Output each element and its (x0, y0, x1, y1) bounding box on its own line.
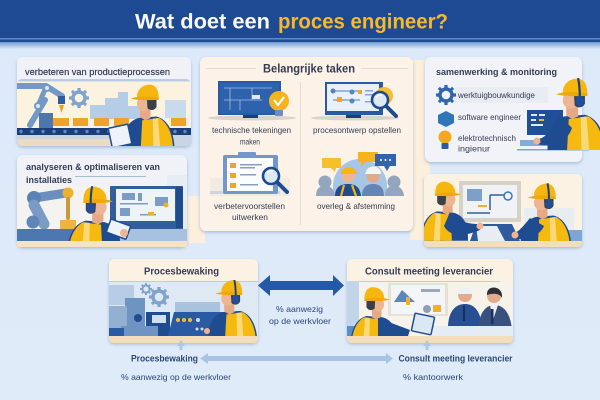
icon: light bulb (438, 130, 452, 149)
list item: software engineer: software engineer (458, 112, 521, 122)
task: technische tekeningen (208, 81, 296, 146)
heading: Procesbewaking (144, 266, 219, 278)
task: verbetervoorstellen (210, 152, 290, 222)
small arrow right (423, 340, 431, 350)
desk console (470, 224, 520, 241)
header banner (0, 0, 600, 49)
label: procesbewaking: % aanwezig op de werkvloer (121, 372, 231, 382)
robot arm (17, 85, 62, 125)
label: technische tekeningen (212, 125, 291, 135)
icon: two workers and speech bubbles (316, 152, 404, 196)
chairs (427, 222, 582, 241)
list item: werktuigbouwkundige: werktuigbouwkundige (457, 90, 535, 100)
boxes on conveyor (53, 118, 186, 126)
label: overleg & afstemming (317, 201, 395, 211)
monitor (110, 186, 183, 230)
icon: gear (69, 88, 89, 108)
heading: Consult meeting leverancier (365, 266, 493, 278)
title: proces engineer? (278, 10, 448, 34)
text: aanwezig op de werkvloer (269, 304, 331, 326)
worker right (512, 183, 572, 247)
list item: elektrotechnisch: elektrotechnisch (458, 133, 516, 143)
meeting illustration (347, 281, 513, 336)
worker (68, 186, 120, 241)
board (388, 283, 448, 316)
text: aanwezig op de werkvloer: op de werkvloer (269, 316, 331, 326)
icon: blueprint monitor (208, 81, 296, 120)
tablet (108, 124, 132, 148)
panel: consult meeting leverancier (347, 259, 513, 345)
double arrow (258, 275, 344, 296)
label: consult meeting leverancier (398, 354, 513, 382)
panel: belangrijke taken (200, 57, 413, 231)
label: procesontwerp opstellen (313, 125, 401, 135)
icon: clipboard with magnifier (210, 152, 290, 196)
label: consult meeting leverancier: % kantoorwerk (403, 372, 464, 382)
list item: werktuigbouwkundige (436, 85, 548, 105)
list item: elektrotechnisch: ingienur (458, 144, 490, 154)
worker (351, 287, 392, 336)
base (17, 229, 120, 241)
table (432, 326, 513, 336)
panel: samenwerking scene (420, 174, 582, 247)
worker (124, 85, 174, 148)
tablet (106, 219, 131, 239)
worker left (420, 182, 484, 241)
monitor (517, 110, 589, 150)
tablet (411, 313, 435, 335)
panel: analyseren en optimaliseren: installaties (26, 175, 72, 186)
monitor (459, 181, 521, 222)
list item: software engineer (438, 111, 521, 127)
control room illustration (109, 280, 258, 341)
panel heading: analyseren & optimaliseren van (26, 162, 160, 173)
title: Wat doet een (135, 10, 270, 34)
label: verbetervoorstellen (214, 201, 285, 211)
icon: software (438, 111, 454, 127)
list item: elektrotechnisch (438, 130, 516, 154)
label: procesbewaking: Procesbewaking (131, 354, 198, 364)
panel: analyseren en optimaliseren (17, 155, 187, 254)
panel: verbeteren van productieprocessen (17, 57, 191, 148)
task: technische tekeningen: maken (240, 136, 260, 146)
heading: Belangrijke taken (263, 64, 355, 76)
desk edge (424, 241, 582, 247)
worker (534, 78, 600, 150)
icon: process monitor (311, 82, 399, 120)
icon: gears (149, 287, 169, 307)
task: overleg (316, 152, 404, 211)
label: procesbewaking (121, 354, 231, 382)
conveyor belt (17, 128, 191, 135)
panel: procesbewaking (109, 259, 258, 343)
panel: samenwerking en monitoring (425, 57, 600, 162)
icon: gear (436, 85, 456, 105)
task: verbetervoorstellen: uitwerken (232, 212, 268, 222)
panel heading: verbeteren van productieprocessen (25, 67, 170, 78)
heading: samenwerking & monitoring (436, 67, 557, 78)
installation illustration (17, 175, 187, 241)
label: consult meeting leverancier: Consult meeting leverancier (398, 354, 513, 364)
text: aanwezig op de werkvloer: % aanwezig (276, 304, 323, 314)
task: procesontwerp (311, 82, 401, 135)
robot arm (27, 188, 74, 224)
light double arrow (200, 353, 393, 364)
worker (208, 280, 257, 341)
side strips behind panels (185, 60, 430, 243)
suppliers (448, 288, 512, 326)
factory illustration (17, 79, 191, 148)
small arrow left (177, 340, 185, 350)
